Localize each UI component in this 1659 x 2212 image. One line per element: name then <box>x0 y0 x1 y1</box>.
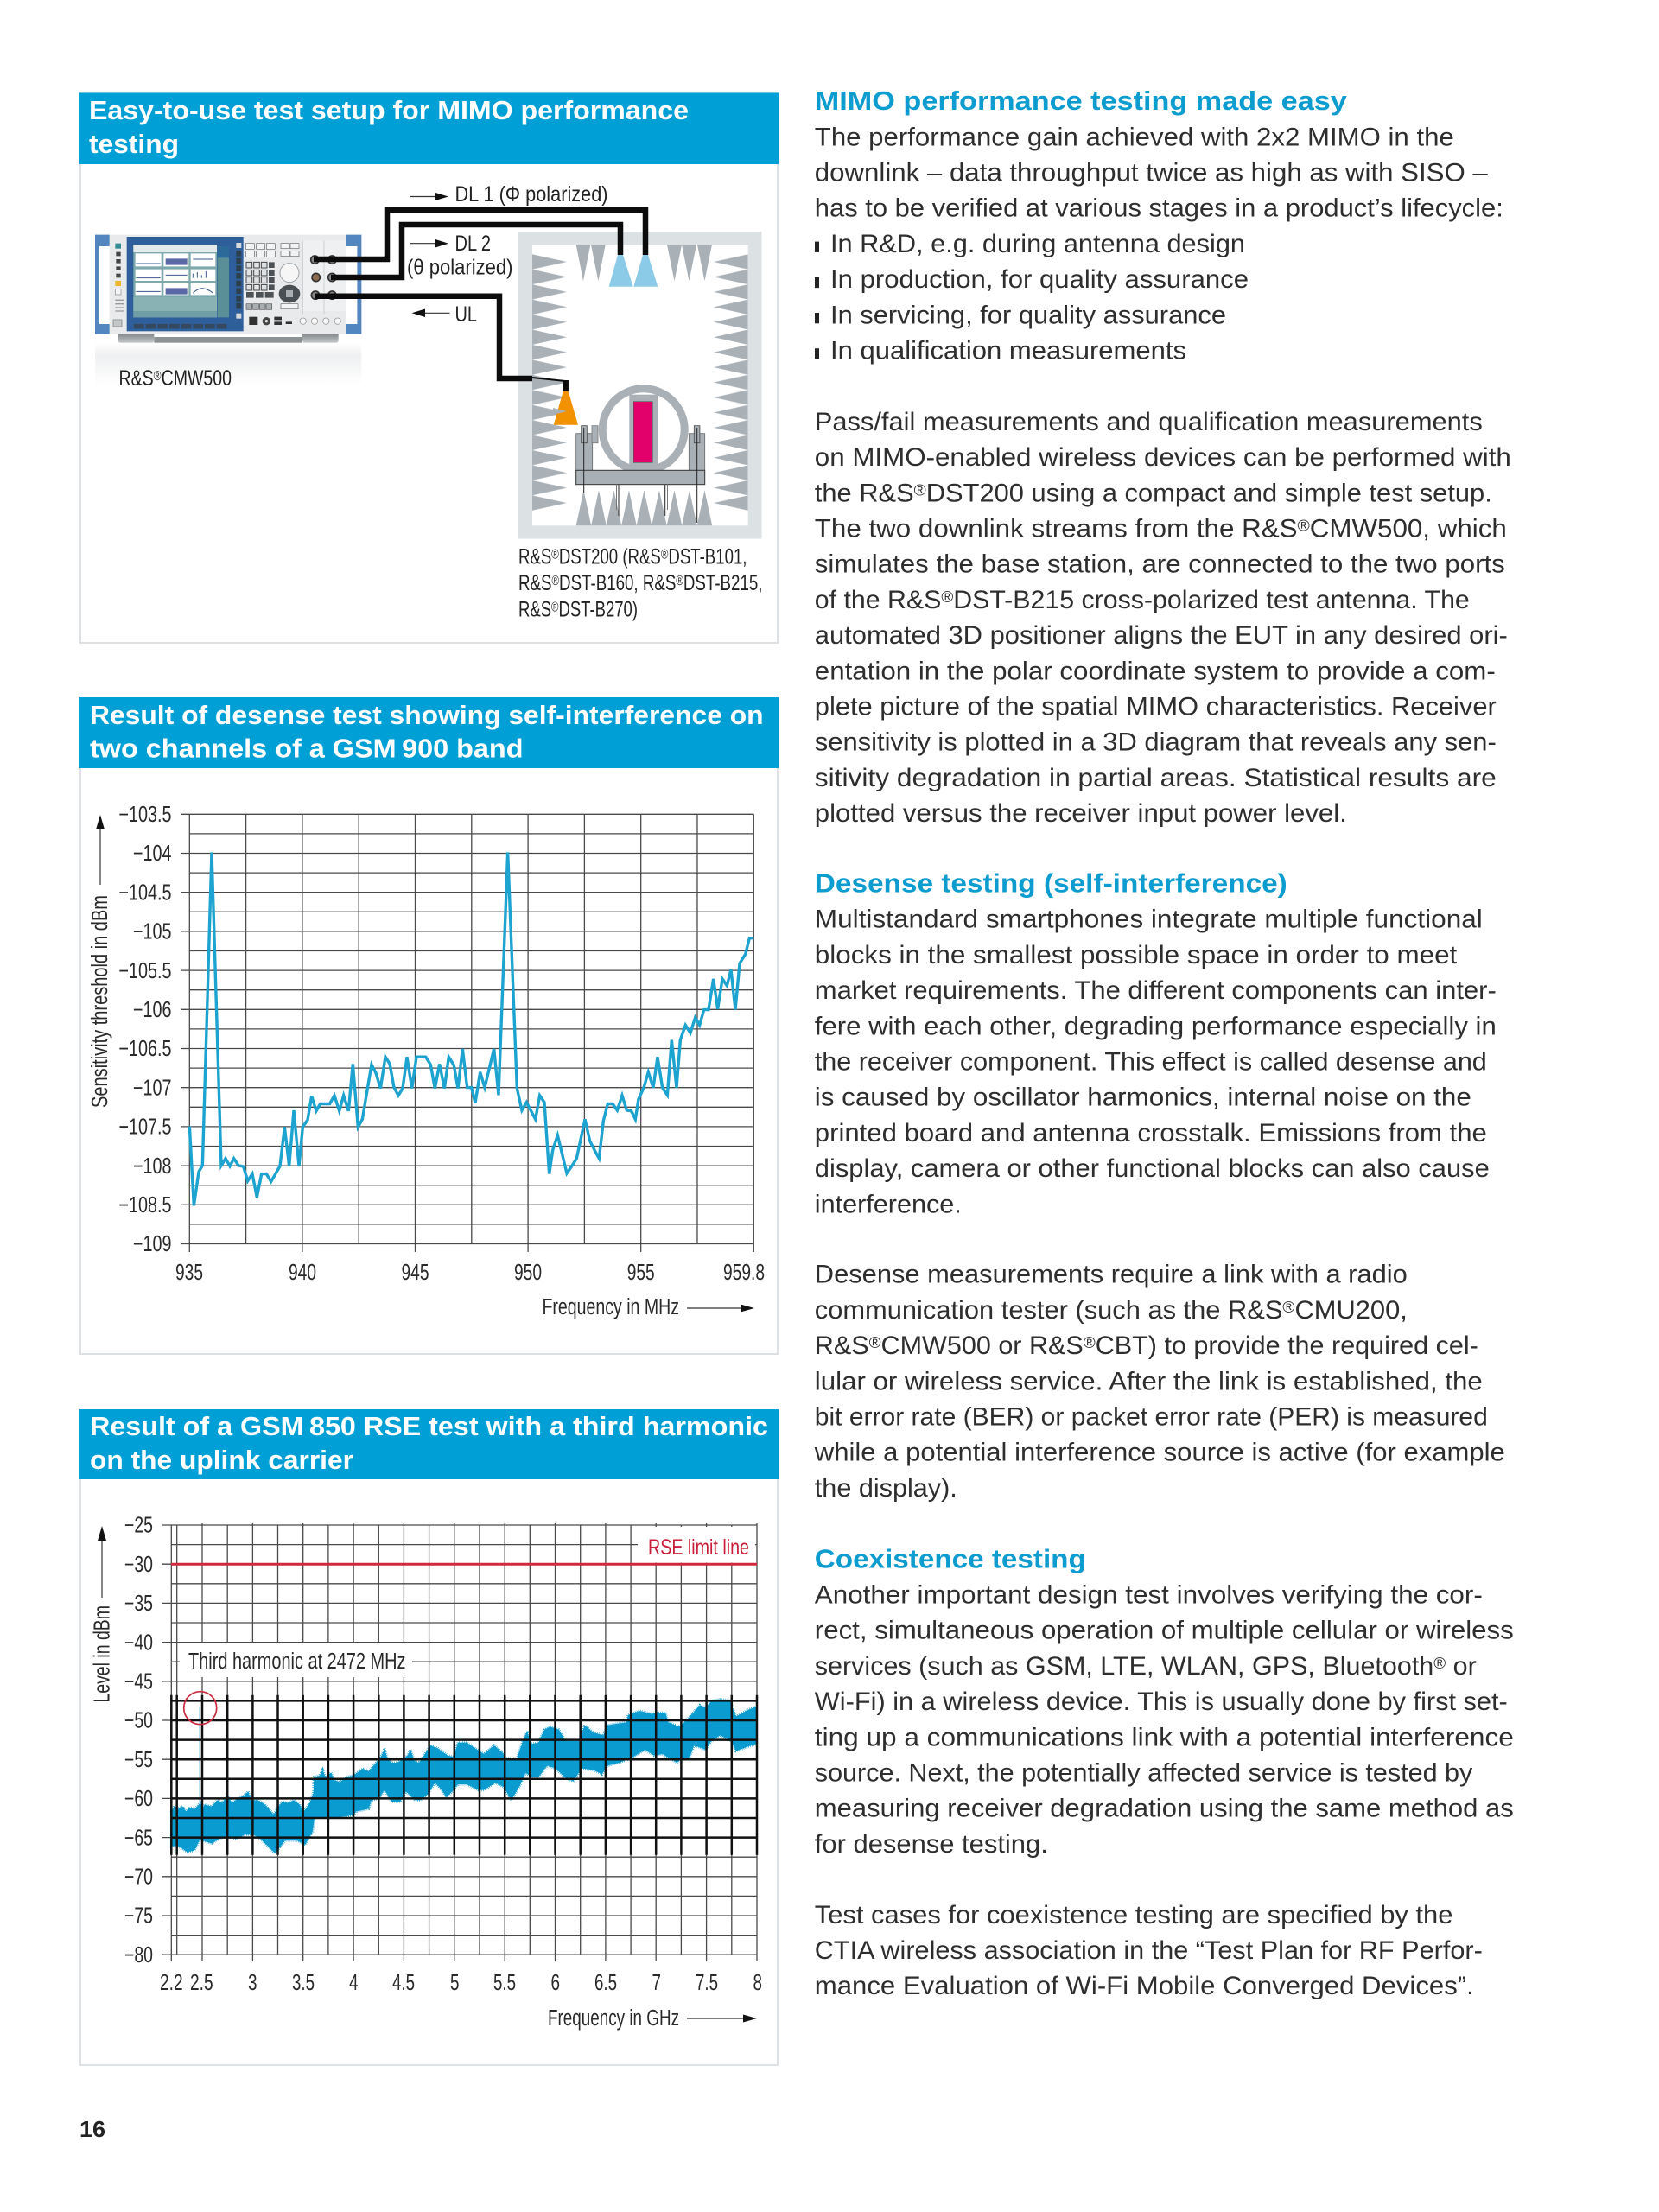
panel heading bar: two channels of a GSM 900 band <box>90 734 524 764</box>
label: third harmonic: Third harmonic at 2472 MHz <box>188 1649 406 1674</box>
text block: MIMO intro: has to be verified at various stages in a product’s lifecycle: <box>815 194 1503 223</box>
text block: desense measurements: lular or wireless service. After the link is established, the <box>815 1367 1483 1395</box>
text block: coexistence intro: ting up a communications link with a potential interference <box>815 1723 1514 1751</box>
y axis labels <box>124 1514 153 1967</box>
RSE limit line <box>171 1563 757 1566</box>
y axis labels: −70 <box>124 1865 153 1889</box>
right column text <box>814 86 1514 2000</box>
x axis labels: 4.5 <box>392 1971 415 1995</box>
text block: pass/fail measurements: Pass/fail measurements and qualification measurements <box>815 408 1483 436</box>
y axis labels: −106 <box>133 998 171 1022</box>
heading: coexistence testing: Coexistence testing <box>815 1543 1086 1573</box>
text block: coexistence test cases <box>815 1901 1483 2000</box>
text block: MIMO intro <box>815 123 1503 223</box>
y axis labels: −105 <box>133 920 171 944</box>
x axis labels: 6.5 <box>594 1971 617 1995</box>
bullet list: stages: In production, for quality assurance <box>830 265 1249 294</box>
y axis labels: −108.5 <box>119 1193 171 1217</box>
y axis title with arrow: Sensitivity threshold in dBm <box>88 895 112 1108</box>
y axis labels: −75 <box>124 1904 153 1929</box>
text block: desense measurements: R&S®CMW500 or R&S®CBT) to provide the required cel- <box>815 1332 1478 1360</box>
spectrum trace <box>171 1700 756 1853</box>
line chart: sensitivity threshold <box>88 803 765 1319</box>
y axis labels: −55 <box>124 1748 153 1772</box>
y axis labels: −107.5 <box>119 1116 171 1140</box>
text block: desense intro: the receiver component. This effect is called desense and <box>815 1047 1487 1077</box>
label: UL: UL <box>454 302 477 327</box>
y axis labels: −106.5 <box>119 1037 171 1061</box>
x axis labels: 959.8 <box>723 1261 765 1285</box>
y axis labels: −104 <box>133 842 171 866</box>
x axis labels: 2.5 <box>190 1971 213 1995</box>
text block: pass/fail measurements: plete picture of the spatial MIMO characteristics. Receiver <box>815 693 1497 721</box>
label: RSE limit line: RSE limit line <box>648 1535 749 1560</box>
data line <box>189 852 753 1205</box>
text block: desense measurements: communication tester (such as the R&S ®CMU200, <box>815 1296 1408 1325</box>
text block: MIMO intro: downlink – data throughput twice as high as with SISO – <box>815 159 1488 187</box>
text block: pass/fail measurements: the R&S®DST200 using a compact and simple test setup. <box>815 479 1492 507</box>
text block: pass/fail measurements: on MIMO-enabled wireless devices can be performed with <box>815 443 1511 472</box>
y axis labels: −65 <box>124 1826 153 1850</box>
panel heading bar: on the uplink carrier <box>90 1446 353 1475</box>
arrow: DL 2 <box>410 239 448 247</box>
x axis labels: 940 <box>289 1261 316 1285</box>
text block: MIMO intro: The performance gain achieved with 2x2 MIMO in the <box>815 123 1454 151</box>
label: R&S DST200: R&S®DST-B160, R&S®DST-B215, <box>518 571 762 595</box>
label: DL 2: DL 2 <box>454 232 491 256</box>
x axis labels: 935 <box>175 1261 203 1285</box>
device: R&S CMW500 tester <box>95 235 361 386</box>
callout: red circle around third harmonic <box>184 1692 217 1725</box>
y axis labels: −80 <box>124 1943 153 1967</box>
panel heading bar: Result of a GSM 850 RSE test with a third harmonic <box>90 1412 768 1441</box>
third harmonic spike <box>199 1707 200 1802</box>
x axis labels <box>175 1261 765 1285</box>
text block: desense intro: blocks in the smallest possible space in order to meet <box>815 941 1458 969</box>
x axis labels: 6 <box>551 1971 560 1995</box>
icon: orange uplink antenna <box>554 391 578 425</box>
icon: positioner with device under test <box>576 389 705 523</box>
bullet list: stages <box>815 230 1249 365</box>
text block: coexistence intro: for desense testing. <box>815 1830 1048 1859</box>
x axis title with arrow: Frequency in GHz <box>548 2006 679 2031</box>
panel: desense test result <box>79 697 779 1354</box>
text block: desense intro: Multistandard smartphones integrate multiple functional <box>815 906 1483 934</box>
panel frame <box>80 698 778 1354</box>
y axis labels: −105.5 <box>119 959 171 983</box>
panel heading bar: Result of desense test showing self-interference on <box>90 701 764 730</box>
text block: coexistence intro: rect, simultaneous operation of multiple cellular or wireless <box>815 1617 1514 1645</box>
x axis labels: 4 <box>349 1971 358 1995</box>
y axis labels: −104.5 <box>119 880 171 905</box>
text block: desense intro: is caused by oscillator harmonics, internal noise on the <box>815 1084 1471 1112</box>
text block: coexistence intro: source. Next, the potentially affected service is tested by <box>815 1759 1472 1787</box>
y axis labels: −107 <box>133 1076 171 1100</box>
panel frame <box>80 93 778 643</box>
label: R&S DST200: R&S®DST200 (R&S®DST-B101, <box>518 544 747 569</box>
panel heading bar <box>79 93 779 164</box>
x axis labels: 3 <box>248 1971 257 1995</box>
y axis labels: −108 <box>133 1154 171 1179</box>
panel: GSM 850 RSE test result <box>79 1409 779 2065</box>
y axis labels: −103.5 <box>119 803 171 827</box>
panel frame <box>80 1410 778 2065</box>
text block: desense measurements: bit error rate (BER) or packet error rate (PER) is measured <box>815 1403 1488 1431</box>
spectrum chart: level vs frequency <box>90 1514 762 2031</box>
text block: pass/fail measurements: The two downlink streams from the R&S ®CMW500, which <box>815 515 1507 543</box>
label: DL 1: DL 1 (Φ polarized) <box>454 182 608 207</box>
cable: DL 2 <box>331 225 620 277</box>
text block: coexistence intro: measuring receiver degradation using the same method as <box>815 1795 1514 1823</box>
arrow: UL <box>412 309 449 317</box>
y axis labels: −50 <box>124 1709 153 1733</box>
x axis labels: 7 <box>652 1971 661 1995</box>
text block: desense intro: interference. <box>815 1190 962 1218</box>
panel: test setup for MIMO <box>79 93 779 643</box>
text block: desense measurements: the display). <box>815 1474 957 1503</box>
text block: coexistence intro: Another important design test involves verifying the cor- <box>815 1581 1483 1609</box>
label: R&S DST200 <box>518 544 762 622</box>
heading: MIMO performance testing: MIMO performance testing made easy <box>815 86 1348 116</box>
text block: coexistence intro: Wi-Fi) in a wireless device. This is usually done by first set- <box>815 1688 1508 1716</box>
y axis labels: −30 <box>124 1553 153 1577</box>
heading: desense testing: Desense testing (self-interference) <box>815 868 1287 899</box>
heavy grid overlay <box>171 1695 757 1855</box>
cable: DL 1 <box>314 210 645 259</box>
bullet list: stages: In qualification measurements <box>830 337 1186 365</box>
text block: desense intro <box>815 906 1497 1218</box>
y axis labels <box>119 803 171 1256</box>
text block: coexistence test cases: CTIA wireless association in the “Test Plan for RF Perfor- <box>815 1936 1483 1965</box>
label: R&S CMW500: R&S®CMW500 <box>119 366 232 391</box>
y axis labels: −109 <box>133 1232 171 1256</box>
text block: desense measurements: Desense measurements require a link with a radio <box>815 1261 1408 1289</box>
panel heading bar: Easy-to-use test setup for MIMO performance <box>89 96 689 125</box>
text block: desense intro: fere with each other, degrading performance especially in <box>815 1012 1497 1040</box>
label: DL 2: (θ polarized) <box>407 256 513 280</box>
bullet list: stages: In R&D, e.g. during antenna design <box>830 230 1245 258</box>
text block: pass/fail measurements: sitivity degradation in partial areas. Statistical results are <box>815 764 1497 792</box>
bullet list: stages: In servicing, for quality assurance <box>830 301 1226 329</box>
x axis labels: 955 <box>627 1261 655 1285</box>
label: R&S DST200: R&S®DST-B270) <box>518 598 638 622</box>
y axis labels: −45 <box>124 1669 153 1694</box>
text block: coexistence test cases: mance Evaluation of Wi-Fi Mobile Converged Devices”. <box>815 1972 1474 2000</box>
icon: blue downlink antenna pair <box>609 255 658 287</box>
text block: pass/fail measurements: automated 3D positioner aligns the EUT in any desired ori- <box>815 621 1508 650</box>
x axis labels: 8 <box>753 1971 762 1995</box>
label masks <box>180 1527 755 1677</box>
arrow: DL 1 <box>410 193 448 200</box>
text block: coexistence test cases: Test cases for coexistence testing are specified by the <box>815 1901 1452 1929</box>
x axis labels: 7.5 <box>696 1971 718 1995</box>
panel heading bar <box>79 697 779 768</box>
text block: desense intro: printed board and antenna crosstalk. Emissions from the <box>815 1119 1487 1147</box>
x axis labels: 945 <box>401 1261 429 1285</box>
y axis title with arrow: Level in dBm <box>90 1605 114 1703</box>
text block: coexistence intro <box>815 1581 1514 1859</box>
x axis labels: 5 <box>450 1971 460 1995</box>
y axis labels: −40 <box>124 1630 153 1655</box>
x axis labels: 950 <box>514 1261 542 1285</box>
text block: desense intro: market requirements. The different components can inter- <box>815 976 1497 1005</box>
text block: pass/fail measurements: of the R&S®DST-B215 cross-polarized test antenna. The <box>815 586 1470 614</box>
text block: desense measurements <box>814 1261 1505 1503</box>
label: DL 2 <box>407 232 513 280</box>
text block: pass/fail measurements: sensitivity is plotted in a 3D diagram that reveals any sen- <box>815 728 1497 757</box>
text block: pass/fail measurements: simulates the base station, are connected to the two ports <box>815 550 1505 579</box>
x axis labels: 3.5 <box>292 1971 315 1995</box>
text block: desense intro: display, camera or other functional blocks can also cause <box>815 1154 1490 1183</box>
y axis labels: −60 <box>124 1787 153 1811</box>
shielded test chamber <box>518 232 762 539</box>
text block: coexistence intro: services (such as GSM, LTE, WLAN, GPS, Bluetooth ® or <box>815 1652 1477 1681</box>
text block: pass/fail measurements <box>815 408 1511 828</box>
x axis labels: 2.2 <box>160 1971 183 1995</box>
x axis title with arrow: Frequency in MHz <box>543 1295 679 1319</box>
y axis labels: −25 <box>124 1514 153 1538</box>
text block: pass/fail measurements: plotted versus the receiver input power level. <box>815 799 1347 828</box>
x axis labels: 5.5 <box>493 1971 516 1995</box>
text block: pass/fail measurements: entation in the polar coordinate system to provide a com- <box>815 657 1496 685</box>
page number: 16 <box>79 2116 105 2142</box>
x axis labels <box>160 1971 762 1995</box>
y axis labels: −35 <box>124 1592 153 1616</box>
text block: desense measurements: while a potential interference source is active (for example <box>814 1439 1505 1467</box>
cable: UL <box>315 296 566 391</box>
panel heading bar <box>79 1409 779 1479</box>
panel heading bar: testing <box>89 130 179 159</box>
